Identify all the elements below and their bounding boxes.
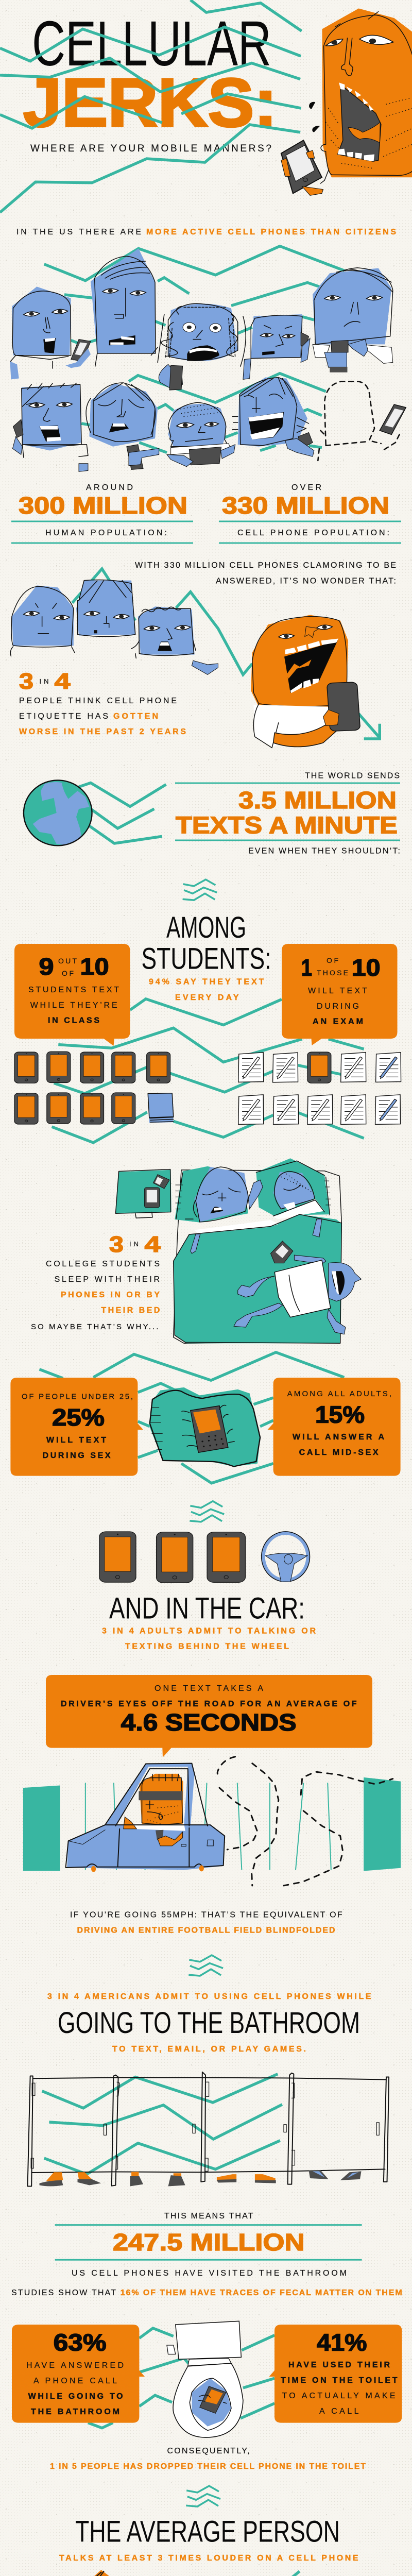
subheading 94 percent: EVERY DAY bbox=[175, 993, 239, 1002]
person 3 bbox=[158, 303, 246, 390]
callout: 25 percent bbox=[10, 1378, 143, 1476]
pictogram: exam papers and one phone bbox=[238, 1052, 401, 1124]
label: A CALL bbox=[319, 2407, 359, 2416]
person 5 bbox=[313, 268, 393, 372]
person 1 bbox=[10, 286, 91, 379]
blanket bbox=[174, 1214, 341, 1343]
247.5 million stat bbox=[55, 2212, 362, 2278]
explanation: SLEEP WITH THEIR bbox=[55, 1275, 160, 1284]
section: students bbox=[14, 879, 401, 1143]
blindfolded text: IF YOU’RE GOING 55MPH: THAT’S THE EQUIVALENT OF bbox=[70, 1910, 342, 1920]
will text during sex: DURING SEX bbox=[43, 1451, 111, 1460]
4.6 seconds: 4.6 SECONDS bbox=[121, 1709, 297, 1736]
explanation bbox=[19, 697, 186, 736]
of those bbox=[317, 956, 348, 977]
car bbox=[67, 1762, 225, 1870]
explanation: PEOPLE THINK CELL PHONE bbox=[19, 697, 177, 705]
person 6 bbox=[12, 383, 88, 471]
globe with zigzags bbox=[24, 780, 166, 845]
of those: THOSE bbox=[317, 969, 348, 977]
subheading: TEXTING BEHIND THE WHEEL bbox=[125, 1642, 289, 1651]
zigzags bbox=[52, 999, 364, 1143]
zigzag behind characters bbox=[72, 569, 380, 739]
illustration: phone in toilet bbox=[167, 2321, 243, 2437]
around: AROUND bbox=[86, 483, 133, 492]
300 million: 300 MILLION bbox=[19, 492, 187, 519]
clamoring text: WITH 330 MILLION CELL PHONES CLAMORING TO BE bbox=[135, 561, 396, 570]
even when they shouldn't: EVEN WHEN THEY SHOULDN’T: bbox=[248, 847, 400, 855]
explanation: COLLEGE STUDENTS bbox=[46, 1260, 160, 1268]
divider chevrons bbox=[188, 1955, 223, 1976]
section: bathroom bbox=[11, 1955, 402, 2471]
label: IN CLASS bbox=[48, 1016, 99, 1025]
will answer a call: CALL MID-SEX bbox=[299, 1448, 379, 1457]
consequently text: 1 IN 5 PEOPLE HAS DROPPED THEIR CELL PHONE IN THE TOILET bbox=[50, 2462, 366, 2471]
explanation: WORSE IN THE PAST 2 YEARS bbox=[19, 727, 186, 736]
blindfolded text: DRIVING AN ENTIRE FOOTBALL FIELD BLINDFOLDED bbox=[77, 1926, 335, 1935]
callout: 4.6 seconds bbox=[46, 1675, 372, 1757]
section: world texts bbox=[24, 772, 400, 855]
zigzags bbox=[40, 1352, 344, 1483]
330 million: 330 MILLION bbox=[222, 492, 389, 519]
figure 10: 10 bbox=[80, 953, 109, 980]
stall zigzags bbox=[42, 2074, 282, 2174]
consequently text bbox=[50, 2447, 366, 2471]
feet bbox=[40, 2170, 362, 2187]
third sleeper bbox=[234, 1255, 362, 1334]
label: STUDENTS TEXT bbox=[28, 986, 119, 994]
label: A PHONE CALL bbox=[33, 2377, 117, 2385]
out of: OUT bbox=[58, 957, 77, 965]
41 percent: 41% bbox=[317, 2329, 367, 2356]
sleeping man bbox=[248, 1172, 324, 1219]
number 4: 4 bbox=[55, 669, 71, 694]
cell phone population stat bbox=[219, 483, 401, 543]
25 percent: 25% bbox=[52, 1404, 105, 1431]
label: WILL TEXT bbox=[308, 987, 367, 995]
label: TIME ON THE TOILET bbox=[281, 2376, 398, 2385]
subheading 94 percent bbox=[149, 978, 264, 1002]
subheading: 3 IN 4 ADULTS ADMIT TO TALKING OR bbox=[102, 1627, 316, 1636]
63 percent: 63% bbox=[54, 2329, 107, 2356]
sleeping woman bbox=[185, 1167, 248, 1222]
number 3: 3 bbox=[109, 1232, 124, 1257]
character: shouting orange man with tablet bbox=[281, 8, 412, 195]
callout: 15 percent bbox=[268, 1378, 401, 1476]
callout: 9 out of 10 bbox=[14, 944, 130, 1046]
section: in the car bbox=[23, 1501, 401, 1935]
explanation: ETIQUETTE HAS bbox=[19, 712, 108, 721]
section: population bbox=[10, 228, 406, 585]
section: average person bbox=[12, 2486, 399, 2576]
label: WHILE THEY’RE bbox=[30, 1001, 117, 1010]
person 7 bbox=[86, 383, 159, 469]
number 4: 4 bbox=[145, 1232, 161, 1257]
three blue people bbox=[10, 580, 218, 674]
label bbox=[26, 2361, 124, 2416]
zigzags behind toilet bbox=[88, 2328, 274, 2428]
section: during sex bbox=[10, 1352, 401, 1483]
subheading 94 percent: 94% SAY THEY TEXT bbox=[149, 978, 264, 986]
subheading: TALKS AT LEAST 3 TIMES LOUDER ON A CELL PHONE bbox=[59, 2554, 358, 2563]
person 9 bbox=[233, 378, 314, 456]
one text takes a: ONE TEXT TAKES A bbox=[154, 1684, 263, 1693]
bed frame bbox=[174, 1170, 341, 1343]
label bbox=[308, 987, 367, 1026]
header section bbox=[0, 0, 412, 212]
orange lead line: 3 IN 4 AMERICANS ADMIT TO USING CELL PHONES WHILE bbox=[47, 1992, 371, 2001]
people under 25: OF PEOPLE UNDER 25, bbox=[22, 1392, 133, 1401]
section: 3 in 4 etiquette bbox=[10, 569, 380, 748]
explanation: GOTTEN bbox=[113, 712, 158, 721]
247.5 million: 247.5 MILLION bbox=[113, 2229, 305, 2256]
divider chevrons bbox=[183, 879, 217, 900]
divider chevrons bbox=[190, 1501, 224, 1522]
number 3: 3 bbox=[19, 669, 33, 694]
zigzags behind crowd bbox=[44, 246, 344, 452]
hand with phone bbox=[156, 1830, 183, 1846]
human population: HUMAN POPULATION: bbox=[45, 529, 167, 537]
person 8 bbox=[167, 402, 235, 467]
15 percent: 15% bbox=[315, 1401, 365, 1428]
among all adults: AMONG ALL ADULTS, bbox=[287, 1389, 391, 1398]
cell phone population: CELL PHONE POPULATION: bbox=[237, 529, 389, 537]
label: THE BATHROOM bbox=[31, 2408, 119, 2416]
eyes off the road: DRIVER’S EYES OFF THE ROAD FOR AN AVERAGE OF bbox=[61, 1700, 357, 1708]
label: TO ACTUALLY MAKE bbox=[282, 2392, 396, 2400]
heading: students: STUDENTS: bbox=[141, 942, 271, 976]
intro line: IN THE US THERE ARE bbox=[16, 228, 141, 236]
nightstand bbox=[115, 1170, 171, 1218]
out of bbox=[58, 957, 77, 977]
will text during sex: WILL TEXT bbox=[46, 1436, 106, 1445]
icons: three phones and a steering wheel bbox=[99, 1532, 310, 1583]
title: cellular: CELLULAR bbox=[32, 9, 271, 79]
figure 1: 1 bbox=[301, 954, 312, 981]
orange person shouting bbox=[251, 615, 360, 748]
heading: and in the car: AND IN THE CAR: bbox=[109, 1591, 305, 1625]
fecal matter line: STUDIES SHOW THAT bbox=[11, 2289, 116, 2297]
stat: 3 in 4 college students bbox=[31, 1232, 161, 1331]
section: sleeping with phones bbox=[31, 1158, 362, 1343]
will text during sex bbox=[43, 1436, 111, 1460]
heading: THE AVERAGE PERSON bbox=[75, 2515, 340, 2548]
human population stat bbox=[11, 483, 193, 543]
word in: IN bbox=[39, 677, 48, 685]
explanation: SO MAYBE THAT’S WHY... bbox=[31, 1323, 159, 1331]
fecal matter line: 16% OF THEM HAVE TRACES OF FECAL MATTER ON THEM bbox=[121, 2289, 402, 2297]
explanation: THEIR BED bbox=[101, 1306, 160, 1315]
3.5 million: 3.5 MILLION bbox=[238, 787, 397, 814]
illustration: blindfolded driver bbox=[23, 1757, 401, 1886]
stat: 3 in 4 bbox=[19, 669, 186, 736]
over: OVER bbox=[291, 483, 321, 492]
dashed swerving path bbox=[217, 1757, 393, 1886]
clamoring text bbox=[135, 561, 396, 585]
out of: OF bbox=[62, 969, 74, 977]
consequently text: CONSEQUENTLY, bbox=[167, 2447, 249, 2455]
label: WHILE GOING TO bbox=[28, 2392, 123, 2401]
divider chevrons bbox=[186, 2486, 220, 2506]
figure 9: 9 bbox=[39, 953, 54, 980]
extra phone bbox=[380, 404, 406, 434]
pictogram: nine phones and a book bbox=[14, 1052, 174, 1124]
person 2 bbox=[91, 248, 158, 366]
clamoring text: ANSWERED, IT’S NO WONDER THAT: bbox=[216, 577, 396, 585]
callout: 41 percent bbox=[269, 2325, 402, 2423]
texts a minute: TEXTS A MINUTE bbox=[176, 812, 398, 839]
driver bbox=[124, 1774, 185, 1831]
callout: 1 of those 10 bbox=[282, 944, 398, 1045]
title: jerks: JERKS: bbox=[23, 65, 277, 141]
illustration: toilet stalls bbox=[28, 2072, 389, 2187]
crowd of blue people with phones bbox=[10, 248, 406, 471]
word in: IN bbox=[129, 1240, 139, 1248]
dashed missing person bbox=[318, 381, 400, 461]
label bbox=[281, 2361, 398, 2416]
label: HAVE USED THEIR bbox=[288, 2361, 390, 2369]
orange follow line: TO TEXT, EMAIL, OR PLAY GAMES. bbox=[112, 2045, 306, 2054]
label: DURING bbox=[317, 1002, 359, 1011]
visited the bathroom: US CELL PHONES HAVE VISITED THE BATHROOM bbox=[72, 2269, 347, 2278]
this means that: THIS MEANS THAT bbox=[164, 2212, 253, 2221]
intro highlight: MORE ACTIVE CELL PHONES THAN CITIZENS bbox=[146, 228, 396, 236]
label: HAVE ANSWERED bbox=[26, 2361, 124, 2370]
pillows bbox=[175, 1158, 330, 1223]
zigzags behind people grid bbox=[169, 2571, 386, 2576]
label bbox=[28, 986, 119, 1025]
icon: vibrating phone on pillow bbox=[150, 1387, 260, 1467]
the world sends: THE WORLD SENDS bbox=[305, 772, 400, 781]
zigzag sound lines bbox=[0, 0, 302, 212]
character: screaming man bbox=[24, 2570, 193, 2576]
label: AN EXAM bbox=[313, 1018, 363, 1026]
heading: among: AMONG bbox=[166, 911, 246, 944]
blindfolded text bbox=[70, 1910, 342, 1935]
figure 10: 10 bbox=[352, 954, 381, 981]
subtitle: WHERE ARE YOUR MOBILE MANNERS? bbox=[30, 143, 271, 154]
subheading bbox=[102, 1627, 316, 1651]
explanation bbox=[31, 1260, 160, 1331]
of those: OF bbox=[327, 956, 338, 964]
person 4 bbox=[243, 314, 310, 379]
illustration: couple in bed bbox=[115, 1158, 362, 1343]
goal posts and field bbox=[23, 1777, 401, 1871]
explanation: PHONES IN OR BY bbox=[61, 1291, 160, 1299]
will answer a call: WILL ANSWER A bbox=[293, 1433, 384, 1442]
stall frames bbox=[28, 2072, 389, 2187]
will answer a call bbox=[293, 1433, 384, 1457]
callout: 63 percent bbox=[12, 2325, 145, 2423]
